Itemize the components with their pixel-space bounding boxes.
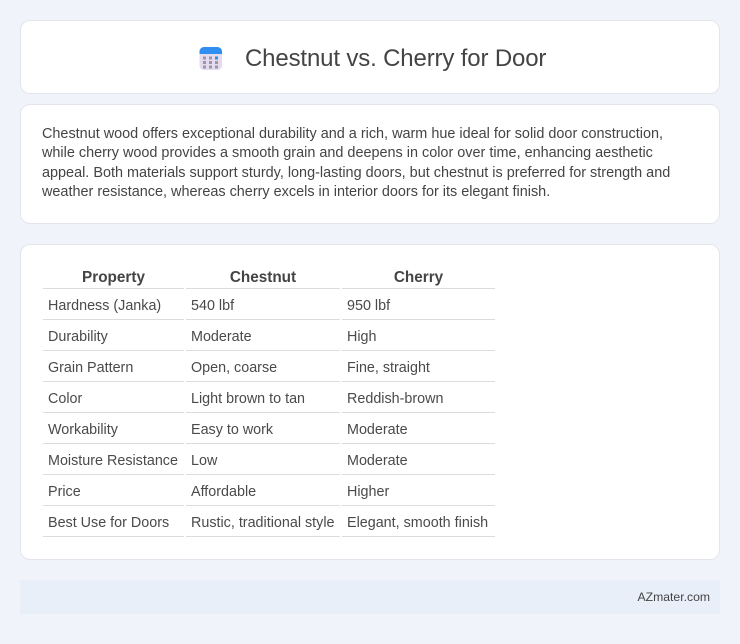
comparison table: Reddish-brown bbox=[347, 391, 443, 407]
comparison table: Moderate bbox=[347, 453, 408, 469]
summary text bbox=[42, 126, 670, 200]
comparison table: Easy to work bbox=[191, 422, 273, 438]
comparison table: Price bbox=[48, 484, 81, 500]
comparison table: Grain Pattern bbox=[48, 360, 133, 376]
comparison table: Elegant, smooth finish bbox=[347, 515, 488, 531]
comparison table: Color bbox=[48, 391, 82, 407]
comparison table: Low bbox=[191, 453, 217, 469]
title: Chestnut vs. Cherry for Door bbox=[245, 45, 546, 72]
comparison table: Higher bbox=[347, 484, 389, 500]
table header: Chestnut bbox=[230, 269, 296, 286]
icon: calendar bbox=[200, 47, 222, 70]
comparison table: Durability bbox=[48, 329, 108, 345]
comparison table: Moisture Resistance bbox=[48, 453, 178, 469]
comparison table: Best Use for Doors bbox=[48, 515, 169, 531]
footer bar bbox=[20, 580, 720, 614]
table header bbox=[82, 269, 443, 286]
comparison table: 540 lbf bbox=[191, 298, 234, 314]
comparison table: Hardness (Janka) bbox=[48, 298, 161, 314]
comparison table: 950 lbf bbox=[347, 298, 390, 314]
summary text: appeal. Both materials support sturdy, long-lasting doors, but chestnut is preferred for strength and bbox=[42, 165, 670, 181]
panel: summary card bbox=[20, 104, 720, 224]
comparison table: Workability bbox=[48, 422, 118, 438]
table header: Property bbox=[82, 269, 145, 286]
summary text: while cherry wood provides a smooth grain and deepens in color over time, enhancing aesthetic bbox=[42, 145, 653, 161]
comparison table: Fine, straight bbox=[347, 360, 430, 376]
comparison table bbox=[43, 269, 495, 537]
comparison table: High bbox=[347, 329, 376, 345]
comparison table: Open, coarse bbox=[191, 360, 277, 376]
panel: title card bbox=[20, 20, 720, 94]
summary text: weather resistance, whereas cherry excels in interior doors for its elegant finish. bbox=[42, 184, 550, 200]
comparison table: Moderate bbox=[347, 422, 408, 438]
summary text: Chestnut wood offers exceptional durability and a rich, warm hue ideal for solid door construction, bbox=[42, 126, 663, 142]
comparison table: Light brown to tan bbox=[191, 391, 305, 407]
footer credit: AZmater.com bbox=[638, 590, 710, 604]
comparison table: Moderate bbox=[191, 329, 252, 345]
comparison table: Affordable bbox=[191, 484, 256, 500]
comparison table: Rustic, traditional style bbox=[191, 515, 334, 531]
table header: Cherry bbox=[394, 269, 443, 286]
panel: comparison table card bbox=[20, 244, 720, 560]
